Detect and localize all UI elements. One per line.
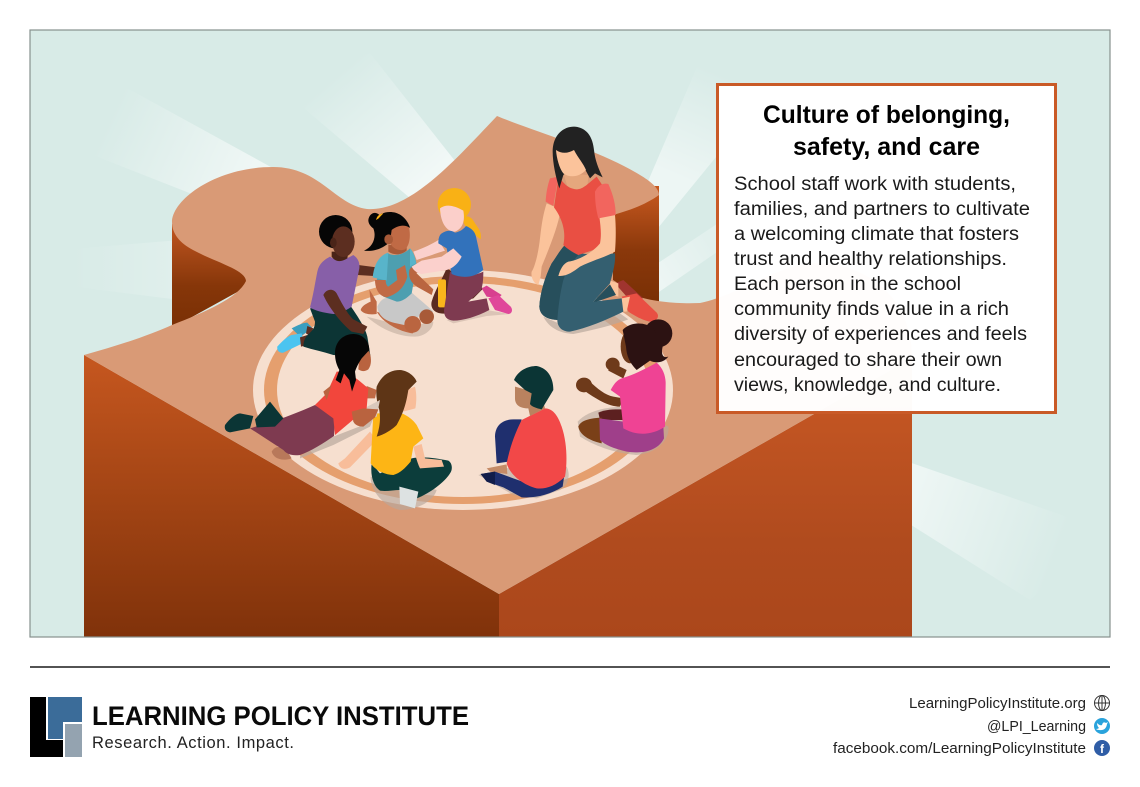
figure: boy in red shirt [478, 366, 569, 498]
tagline: Research. Action. Impact. [92, 734, 294, 752]
left cliff face [84, 355, 499, 637]
box body text: School staff work with students, [734, 174, 1016, 195]
box heading: Culture of belonging, [763, 101, 1010, 129]
logo [30, 697, 82, 757]
right cliff face [499, 414, 912, 636]
figure: girl in yellow shirt [338, 370, 452, 510]
notch cliff [172, 224, 250, 328]
figure: teacher in red shirt [531, 127, 658, 334]
contact links: facebook.com/LearningPolicyInstitute [833, 740, 1086, 757]
figure: child in purple shirt [277, 215, 377, 357]
icon: globe [1094, 696, 1110, 710]
figure: girl lying down in red dotted shirt [225, 334, 380, 460]
organization name: LEARNING POLICY INSTITUTE [92, 701, 469, 731]
box frame [718, 84, 1056, 412]
contact links: LearningPolicyInstitute.org [909, 695, 1086, 712]
text box [718, 84, 1056, 412]
box body text: a welcoming climate that fosters [734, 224, 1019, 245]
box body text: diversity of experiences and feels [734, 324, 1027, 345]
box body text: Each person in the school [734, 274, 961, 295]
circle mat [253, 270, 673, 510]
icon: facebook [1094, 740, 1110, 756]
puzzle piece top surface [84, 116, 814, 594]
contact links: @LPI_Learning [987, 718, 1086, 735]
box body text: community finds value in a rich [734, 299, 1009, 320]
figure: blonde child in blue shirt [412, 188, 512, 323]
figure: child in teal shirt [361, 212, 434, 337]
box heading: safety, and care [793, 133, 980, 161]
figure: child in pink shirt [576, 319, 672, 455]
box body text: families, and partners to cultivate [734, 199, 1030, 220]
box body text: encouraged to share their own [734, 350, 1002, 371]
contact links [833, 695, 1086, 757]
icon: twitter [1094, 718, 1110, 734]
panel: illustration scene [30, 30, 1110, 637]
box body text: trust and healthy relationships. [734, 249, 1007, 270]
sky background [30, 30, 1110, 637]
icon: facebook: f [1100, 742, 1105, 756]
light rays [144, 86, 1012, 571]
box body text: views, knowledge, and culture. [734, 375, 1001, 396]
back cliff [613, 186, 659, 302]
